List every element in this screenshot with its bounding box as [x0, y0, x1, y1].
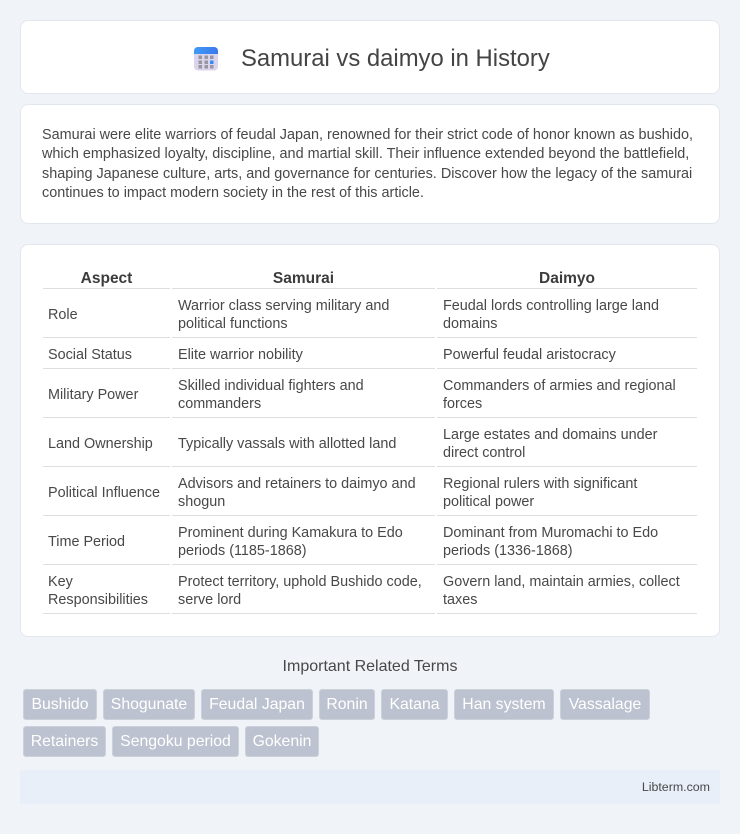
comparison table: direct control [443, 445, 525, 461]
tag: Shogunate [111, 696, 187, 713]
title: Samurai vs daimyo in History [241, 45, 550, 72]
comparison table: Powerful feudal aristocracy [443, 347, 616, 363]
comparison table: political functions [178, 316, 288, 332]
comparison table: Large estates and domains under [443, 427, 657, 443]
comparison table: Regional rulers with significant [443, 476, 637, 492]
row: key responsibilities: Key [48, 574, 73, 590]
comparison table panel [20, 244, 720, 637]
intro text: continues to impact modern society in the rest of this article. [42, 185, 424, 201]
comparison table: Warrior class serving military and [178, 298, 389, 314]
tag: Sengoku period [120, 733, 231, 750]
comparison table: Commanders of armies and regional [443, 378, 676, 394]
comparison table: domains [443, 316, 497, 332]
comparison table [43, 270, 697, 614]
tag: Katana [389, 696, 440, 713]
row: key responsibilities [48, 574, 148, 608]
comparison table: Samurai [273, 270, 334, 287]
tag: Han system [462, 696, 546, 713]
comparison table: political power [443, 494, 534, 510]
tag: Retainers [31, 733, 98, 750]
column headers: Aspect [81, 270, 132, 287]
tag: Gokenin [253, 733, 311, 750]
comparison table: serve lord [178, 592, 241, 608]
tag [112, 726, 239, 757]
comparison table: Protect territory, uphold Bushido code, [178, 574, 422, 590]
comparison table: Dominant from Muromachi to Edo [443, 525, 658, 541]
comparison table: shogun [178, 494, 225, 510]
intro panel [20, 104, 720, 224]
comparison table: forces [443, 396, 482, 412]
row: key responsibilities: Responsibilities [48, 592, 148, 608]
tag [319, 689, 375, 720]
tag [454, 689, 554, 720]
tag [23, 689, 97, 720]
comparison table: Govern land, maintain armies, collect [443, 574, 680, 590]
row: social status: Social Status [48, 347, 132, 363]
tag: Feudal Japan [209, 696, 305, 713]
row: military power: Military Power [48, 387, 138, 403]
comparison table: Daimyo [539, 270, 595, 287]
footer bar [20, 770, 720, 804]
comparison table: Typically vassals with allotted land [178, 436, 396, 452]
tag [245, 726, 319, 757]
tag [103, 689, 195, 720]
header panel [20, 20, 720, 94]
tag: Ronin [326, 696, 368, 713]
comparison table: Feudal lords controlling large land [443, 298, 659, 314]
comparison table: Prominent during Kamakura to Edo [178, 525, 403, 541]
icon: calendar [194, 47, 218, 70]
comparison table: periods (1185-1868) [178, 543, 307, 559]
intro text: which emphasized loyalty, discipline, and martial skill. Their influence extended beyond the battlefield, [42, 146, 689, 162]
comparison table: Skilled individual fighters and [178, 378, 364, 394]
comparison table: commanders [178, 396, 261, 412]
row: political influence: Political Influence [48, 485, 160, 501]
row: land ownership: Land Ownership [48, 436, 153, 452]
tag [560, 689, 650, 720]
intro text: shaping Japanese culture, arts, and governance for centuries. Discover how the legacy of the samurai [42, 166, 692, 182]
tag: Bushido [31, 696, 89, 713]
comparison table: Advisors and retainers to daimyo and [178, 476, 416, 492]
row: role: Role [48, 307, 78, 323]
footer credit: Libterm.com [642, 780, 710, 794]
comparison table: periods (1336-1868) [443, 543, 573, 559]
intro text: Samurai were elite warriors of feudal Japan, renowned for their strict code of honor known as bushido, [42, 127, 693, 143]
comparison table: taxes [443, 592, 477, 608]
related terms heading: Important Related Terms [283, 658, 457, 675]
tag [381, 689, 448, 720]
tag: Vassalage [569, 696, 641, 713]
comparison table: Elite warrior nobility [178, 347, 303, 363]
tag [23, 726, 106, 757]
tag [201, 689, 313, 720]
row: time period: Time Period [48, 534, 125, 550]
intro text [42, 127, 693, 201]
